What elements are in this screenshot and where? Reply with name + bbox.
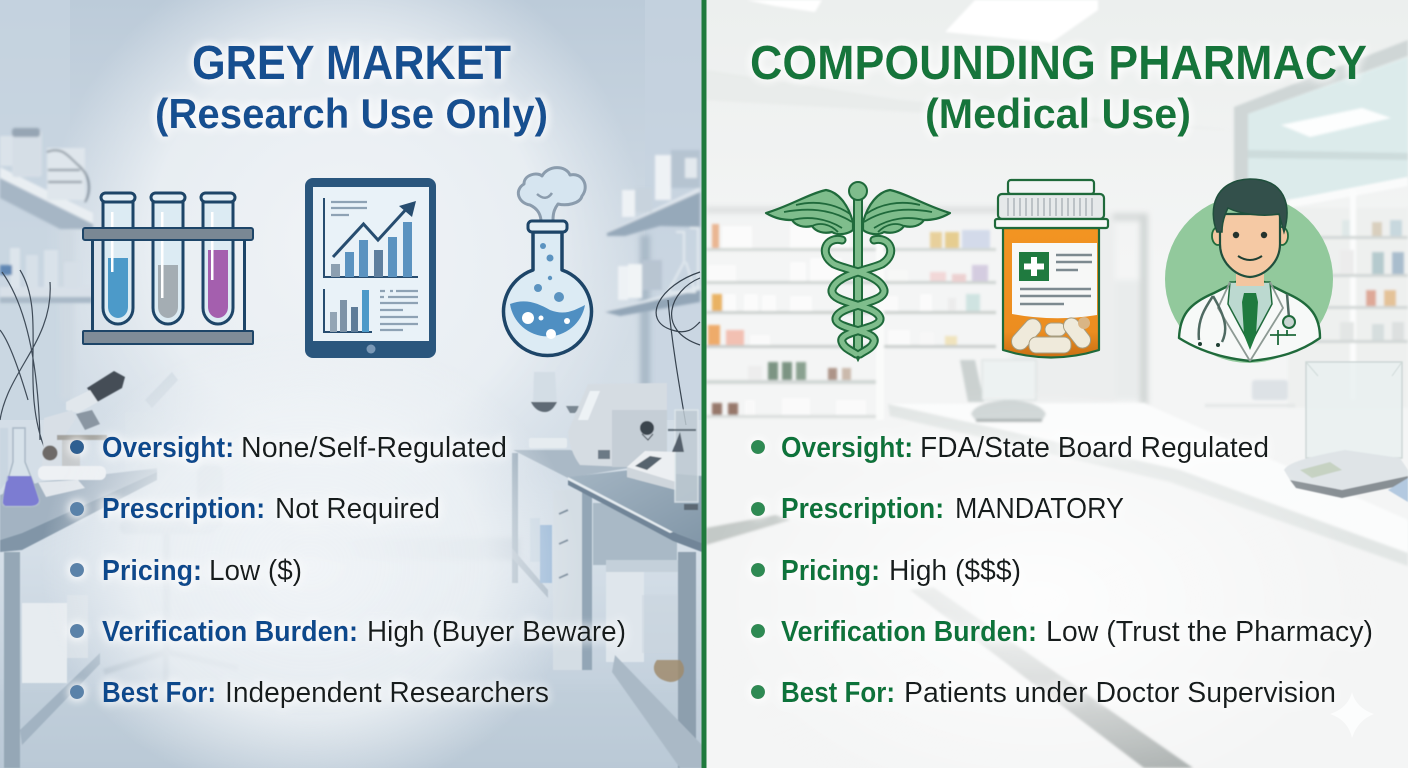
bullet: verification burden: High (Buyer Beware) (367, 616, 626, 648)
bullet: pricing: Pricing: (102, 555, 202, 587)
title: compounding pharmacy: COMPOUNDING PHARMACY (750, 37, 1367, 90)
divider (702, 0, 706, 768)
left shelves (0, 128, 93, 303)
bullet: oversight: None/Self-Regulated (241, 432, 507, 464)
panel: grey market facts (70, 432, 626, 709)
bullet: pricing: Low ($) (209, 555, 302, 587)
tube 1 (101, 193, 135, 324)
tube 3 (201, 193, 235, 324)
title: grey market: GREY MARKET (192, 37, 511, 90)
staff (854, 198, 862, 360)
balance in glass case (1284, 362, 1408, 502)
bullet: verification burden (751, 616, 1373, 648)
bullet: oversight: Oversight: (102, 432, 234, 464)
icon: caduceus (766, 182, 950, 360)
bullet: prescription: Prescription: (102, 493, 265, 525)
bullet: pricing: High ($$$) (889, 555, 1021, 587)
bullet: prescription (70, 493, 440, 525)
bullet: prescription: Prescription: (781, 493, 944, 525)
bullet: prescription: Not Required (275, 493, 440, 525)
icon: boiling flask (504, 168, 592, 356)
bullet: prescription: MANDATORY (955, 493, 1124, 525)
bullet: verification burden (70, 616, 626, 648)
bullet: best for: Patients under Doctor Supervision (904, 677, 1336, 709)
title: compounding pharmacy (750, 37, 1367, 137)
bullet: pricing (751, 555, 1021, 587)
title: grey market: (Research Use Only) (155, 90, 548, 137)
panel: grey market lab background (0, 0, 702, 768)
counter and floor (706, 360, 1408, 768)
bullet: oversight (70, 432, 507, 464)
icon: doctor (1165, 179, 1333, 363)
bullet: oversight: Oversight: (781, 432, 913, 464)
bullet: best for (70, 677, 549, 709)
bullet: oversight (751, 432, 1269, 464)
bullet: oversight: FDA/State Board Regulated (920, 432, 1269, 464)
lower left bench (0, 468, 157, 768)
bullet: verification burden: Verification Burden: (102, 616, 358, 648)
pharmacy shelves (706, 210, 996, 420)
right benches and instrument (512, 372, 702, 768)
bullet: prescription (751, 493, 1124, 525)
icon: test tube rack (83, 193, 253, 344)
panel: compounding pharmacy background (706, 0, 1408, 768)
right shelves (605, 150, 700, 316)
wires (0, 270, 700, 452)
right wing (863, 190, 950, 234)
microscope and glassware (0, 371, 178, 507)
left wing (766, 190, 853, 234)
bullet: best for: Independent Researchers (225, 677, 549, 709)
title: compounding pharmacy: (Medical Use) (925, 90, 1191, 137)
icon: prescription bottle (995, 180, 1108, 358)
bullet: best for: Best For: (781, 677, 895, 709)
bullet: verification burden: Verification Burden: (781, 616, 1037, 648)
icon: tablet with charts (305, 178, 436, 358)
bullet: best for: Best For: (102, 677, 216, 709)
chair (104, 659, 142, 674)
far right shelving (1288, 177, 1408, 208)
panel: compounding pharmacy facts (751, 432, 1373, 709)
snakes (825, 239, 891, 354)
bullet: pricing: Pricing: (781, 555, 880, 587)
title: grey market (155, 37, 548, 137)
icon: sparkle watermark (1330, 692, 1374, 738)
bullet: verification burden: Low (Trust the Pharmacy) (1046, 616, 1373, 648)
tube 2 (151, 193, 185, 324)
bullet: pricing (70, 555, 302, 587)
far bench and floor (507, 233, 652, 554)
